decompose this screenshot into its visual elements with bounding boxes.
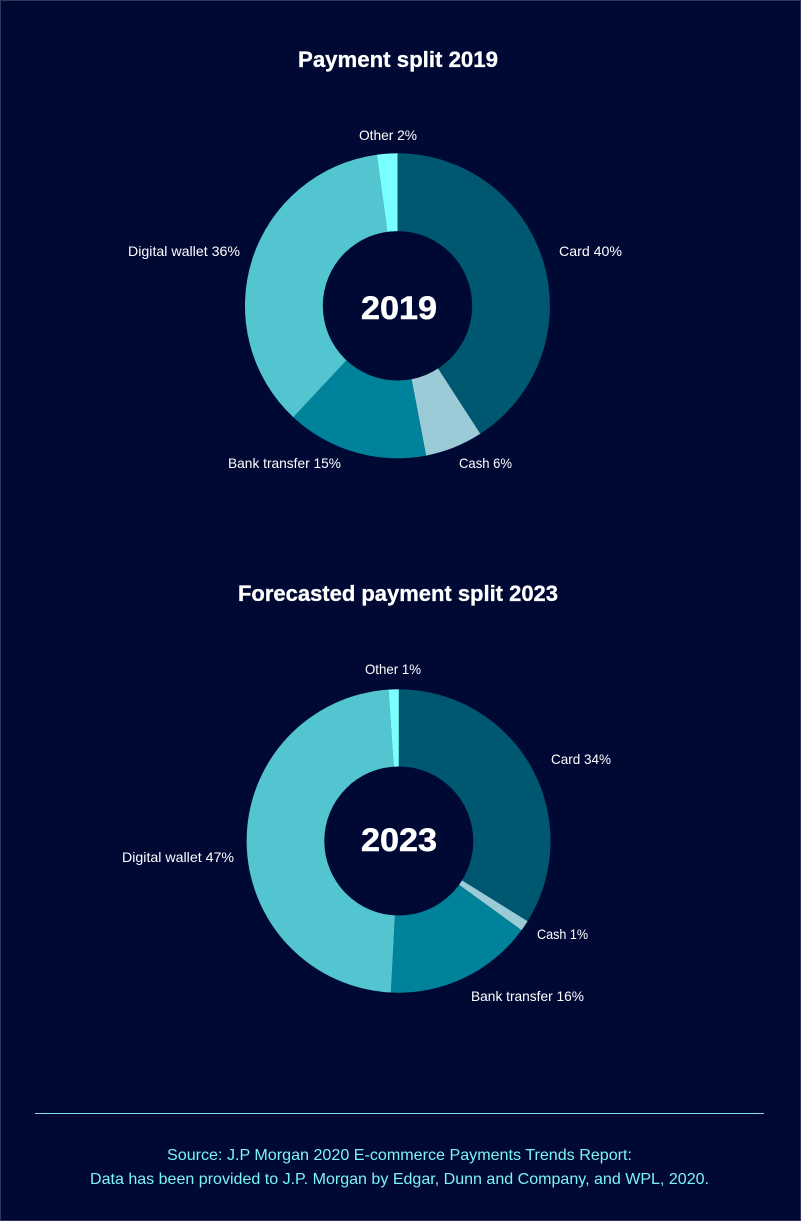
slice: bank transfer 15%	[293, 306, 426, 458]
slice: digital wallet 47%	[247, 690, 399, 992]
label: cash 6%: Cash 6%	[459, 455, 512, 471]
source note: Data has been provided to J.P. Morgan by Edgar, Dunn and Company, and WPL, 2020.	[90, 1171, 709, 1188]
donut hole	[324, 766, 473, 916]
donut chart: 2019	[245, 153, 550, 458]
center label: 2019: 2019	[361, 290, 437, 326]
source note	[90, 1147, 709, 1188]
slice: card 40%	[398, 153, 550, 434]
label: digital wallet 36%: Digital wallet 36%	[128, 243, 240, 259]
label: digital wallet 47%: Digital wallet 47%	[122, 849, 234, 865]
donut hole	[323, 231, 472, 380]
slice: cash 6%	[398, 306, 480, 456]
label: card 34%: Card 34%	[551, 751, 611, 767]
label: card 40%: Card 40%	[559, 243, 622, 259]
slice: cash 1%	[399, 841, 528, 930]
title: payment split 2019: Payment split 2019	[298, 47, 498, 72]
slice: other 2%	[377, 153, 398, 306]
label: other 2%: Other 2%	[359, 127, 417, 143]
title: forecasted payment split 2023: Forecasted payment split 2023	[238, 581, 558, 606]
donut chart: 2023	[247, 689, 551, 993]
label: other 1%: Other 1%	[365, 661, 421, 677]
slice: bank transfer 16%	[391, 841, 522, 993]
center label: 2023: 2023	[361, 822, 437, 858]
slice: other 1%	[388, 689, 399, 841]
slice: digital wallet 36%	[245, 155, 398, 417]
label: cash 1%: Cash 1%	[537, 926, 588, 942]
source note: Source: J.P Morgan 2020 E-commerce Payments Trends Report:	[167, 1147, 632, 1164]
label: bank transfer 16%: Bank transfer 16%	[471, 988, 584, 1004]
slice: card 34%	[399, 689, 551, 921]
label: bank transfer 15%: Bank transfer 15%	[228, 455, 341, 471]
